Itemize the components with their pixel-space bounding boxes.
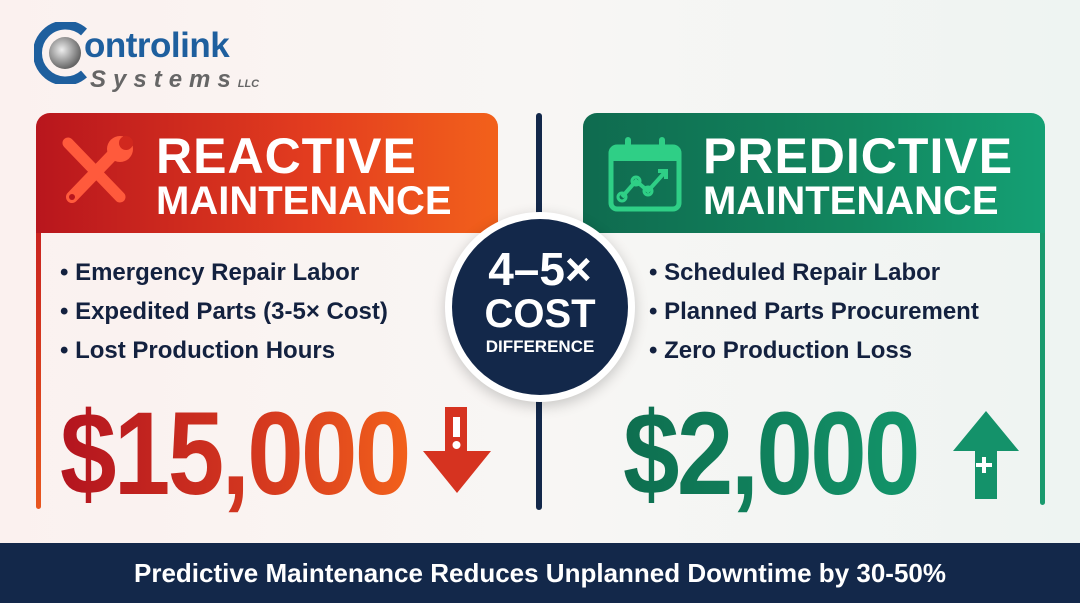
icon: up arrow xyxy=(953,411,1019,499)
left border xyxy=(36,213,41,509)
panel: reactive xyxy=(36,113,498,520)
divider xyxy=(536,113,542,510)
list: reactive costs: • Lost Production Hours xyxy=(60,337,335,364)
list: predictive costs: • Scheduled Repair Labor xyxy=(649,259,940,286)
header: reactive xyxy=(36,113,498,233)
icon: logo sphere xyxy=(34,22,87,84)
big number: $15,000: $15,000 xyxy=(60,388,409,520)
list: predictive costs: • Zero Production Loss xyxy=(649,337,912,364)
icon: calendar chart xyxy=(608,137,682,212)
footer banner: Predictive Maintenance Reduces Unplanned Downtime by 30-50% xyxy=(134,558,946,588)
header: predictive xyxy=(583,113,1045,233)
callout: cost difference circle: COST xyxy=(484,292,596,336)
logo text: ontrolink xyxy=(84,26,229,65)
panel: predictive xyxy=(583,113,1045,520)
list: predictive costs: • Planned Parts Procurement xyxy=(649,298,979,325)
header: reactive: MAINTENANCE xyxy=(156,179,452,223)
logo: SystemsLLC xyxy=(90,66,259,93)
logo xyxy=(34,22,260,93)
big number: $2,000: $2,000 xyxy=(623,388,918,520)
icon: down arrow xyxy=(423,407,491,493)
callout: cost difference circle: DIFFERENCE xyxy=(486,337,594,356)
header: reactive: REACTIVE xyxy=(156,128,417,184)
icon: tools xyxy=(62,136,133,203)
right border xyxy=(1040,213,1045,505)
list: reactive costs: • Expedited Parts (3-5× Cost) xyxy=(60,298,388,325)
footer banner xyxy=(0,543,1080,603)
header: predictive: MAINTENANCE xyxy=(703,179,999,223)
callout: cost difference circle xyxy=(445,212,635,402)
header: predictive: PREDICTIVE xyxy=(703,128,1013,184)
list: reactive costs xyxy=(60,259,388,364)
callout: cost difference circle: 4–5× xyxy=(488,243,592,295)
list: predictive costs xyxy=(649,259,979,364)
list: reactive costs: • Emergency Repair Labor xyxy=(60,259,359,286)
